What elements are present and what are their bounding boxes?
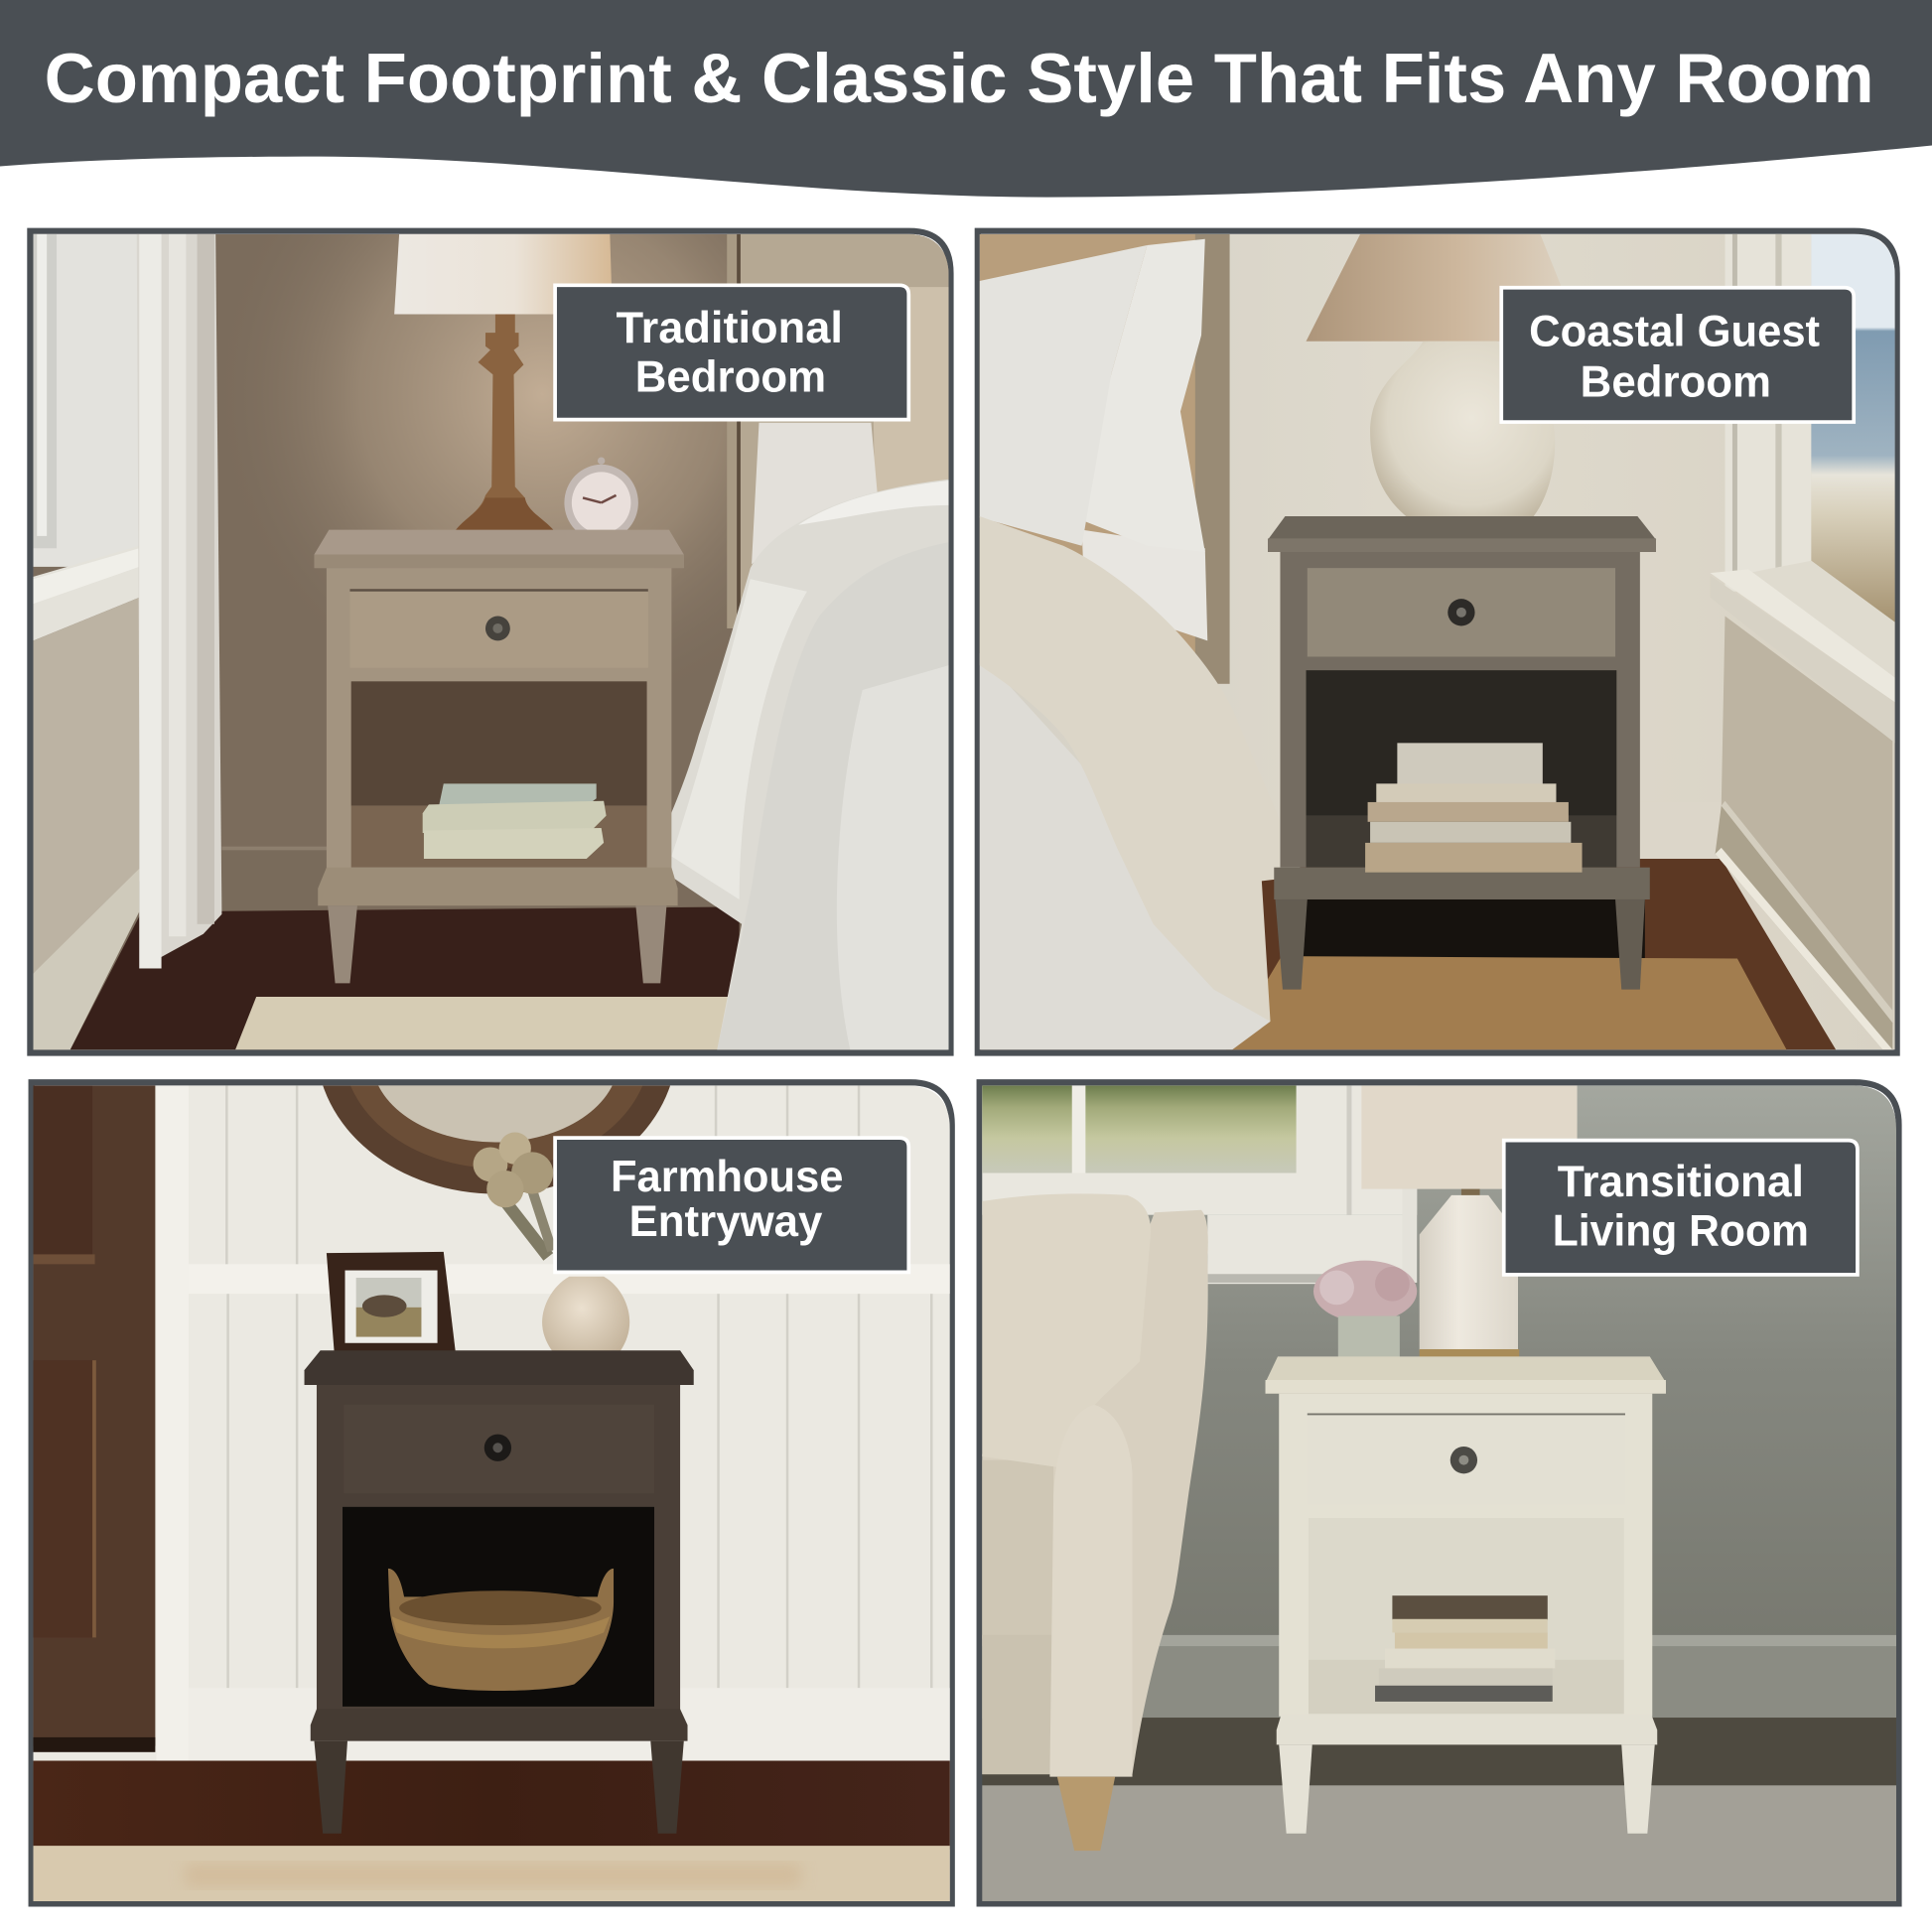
clock: [564, 457, 638, 530]
pillows: [980, 239, 1207, 640]
door: [34, 1085, 155, 1752]
label: traditional bedroom: [555, 285, 908, 420]
nightstand: [1268, 516, 1656, 990]
headboard: [980, 234, 1230, 684]
label: traditional bedroom: Traditional: [617, 304, 843, 352]
floor: [34, 1760, 950, 1850]
nightstand: [1266, 1356, 1666, 1834]
basket: [388, 1569, 614, 1691]
bed: [980, 653, 1271, 1049]
baseboard: [1640, 802, 1722, 860]
label: traditional bedroom: Bedroom: [635, 353, 826, 402]
label: transitional living room: Transitional: [1558, 1158, 1804, 1206]
table lamp: [394, 234, 613, 547]
books: [423, 783, 607, 859]
books: [1365, 743, 1583, 873]
wainscot panels: [225, 1085, 932, 1688]
vase: [542, 1277, 629, 1368]
carpet: [982, 1785, 1896, 1901]
window: [982, 1085, 1417, 1284]
nightstand: [305, 1350, 694, 1834]
floor: [982, 1718, 1896, 1787]
rug: [34, 1846, 950, 1901]
label: transitional living room: [1504, 1141, 1858, 1275]
under-table shadow: [1303, 899, 1645, 958]
label: coastal guest bedroom: Coastal Guest: [1529, 308, 1820, 356]
headboard: [727, 234, 949, 628]
bed cover: [650, 480, 949, 1049]
books: [1375, 1595, 1555, 1702]
label: transitional living room: Living Room: [1553, 1207, 1809, 1256]
panel: farmhouse entryway: [28, 1079, 955, 1906]
panel: coastal guest bedroom: [978, 231, 1897, 1052]
dried flowers: [474, 1133, 553, 1257]
panel: transitional living room: [980, 1082, 1898, 1903]
label: coastal guest bedroom: Bedroom: [1581, 358, 1771, 407]
table lamp: [1361, 1085, 1578, 1370]
rug: [235, 997, 740, 1049]
label: farmhouse entryway: [555, 1138, 908, 1272]
floor: [70, 906, 740, 1049]
window: [1711, 234, 1895, 743]
mirror: [317, 900, 676, 1194]
right wall: [1716, 617, 1892, 1049]
nightstand: [314, 530, 684, 983]
rug: [1226, 956, 1787, 1049]
title: Compact Footprint & Classic Style That Fits Any Room: [45, 39, 1874, 117]
panel: traditional bedroom: [30, 231, 950, 1052]
throw blanket: [980, 516, 1304, 1022]
header banner: [0, 0, 1932, 198]
pillows: [752, 287, 949, 564]
window wall: [34, 234, 139, 1049]
floor: [980, 859, 1836, 1049]
armchair: [982, 1193, 1208, 1851]
label: farmhouse entryway: Entryway: [629, 1197, 823, 1246]
flower vase: [1313, 1261, 1417, 1369]
curtain: [137, 234, 221, 968]
picture frame: [327, 1252, 456, 1364]
label: coastal guest bedroom: [1501, 288, 1854, 422]
baseboard: [982, 1635, 1896, 1719]
lamp: [1307, 234, 1561, 516]
label: farmhouse entryway: Farmhouse: [611, 1153, 844, 1201]
